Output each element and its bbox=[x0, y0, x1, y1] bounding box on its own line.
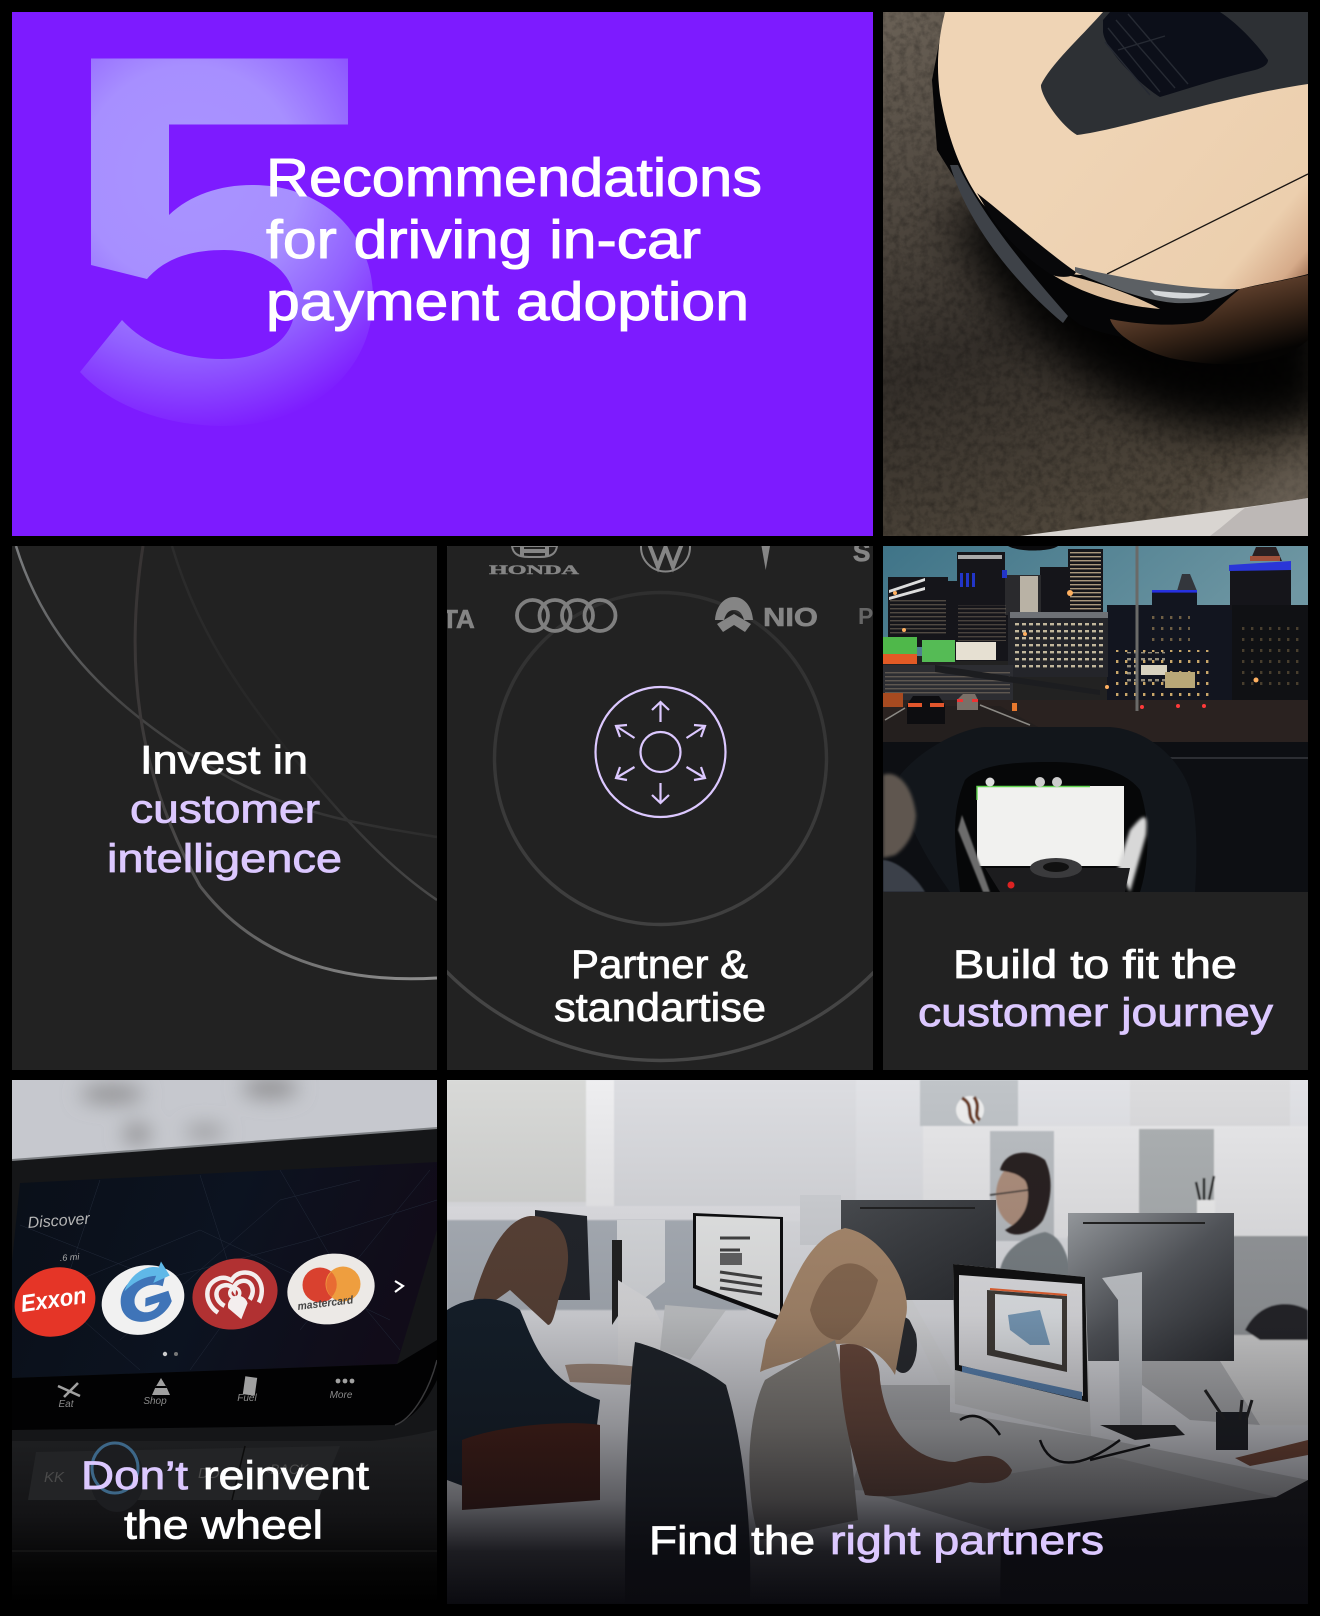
app icon: Mastercard bbox=[281, 1246, 381, 1332]
menu bar bbox=[12, 1340, 437, 1430]
heading: customer journey bbox=[918, 991, 1273, 1035]
vent bbox=[1103, 12, 1268, 97]
title text: Recommendations bbox=[266, 148, 762, 208]
woman in dark jacket bbox=[447, 1216, 640, 1510]
overpass and road bbox=[883, 665, 1013, 703]
heading bbox=[107, 738, 342, 881]
infotainment screen bbox=[0, 1162, 437, 1378]
panel: find the right partners bbox=[447, 1080, 1308, 1604]
app icon: G logo bbox=[93, 1255, 193, 1345]
car shadow on ground bbox=[950, 200, 1320, 431]
heading: Build to fit the bbox=[953, 943, 1237, 987]
panel: car photo bbox=[883, 12, 1308, 536]
heading: standartise bbox=[554, 986, 766, 1030]
title text bbox=[266, 148, 762, 332]
car body bbox=[938, 12, 1308, 290]
heading: reinvent bbox=[203, 1454, 369, 1498]
icon: arrows radiating from a circle bbox=[596, 687, 726, 817]
infotainment screen: .6 mi bbox=[59, 1252, 81, 1263]
dash buttons and knob: DD bbox=[198, 1465, 220, 1482]
dash buttons and knob bbox=[12, 1430, 437, 1604]
title text: for driving in-car bbox=[266, 210, 701, 270]
heading: intelligence bbox=[107, 837, 342, 881]
app icon: iHeartRadio bbox=[185, 1250, 285, 1338]
panel: don't reinvent the wheel bbox=[12, 1080, 437, 1558]
panel: partner and standardise bbox=[442, 537, 873, 1070]
heading bbox=[81, 1454, 369, 1548]
automaker logos: HONDA bbox=[489, 562, 580, 577]
heading: the wheel bbox=[124, 1504, 323, 1548]
panel: title bbox=[12, 12, 873, 536]
heading: Invest in bbox=[140, 738, 308, 782]
dash buttons and knob: KK bbox=[44, 1469, 65, 1486]
heading: Partner & bbox=[571, 943, 748, 987]
panel: invest in customer intelligence bbox=[12, 546, 437, 1070]
console below display bbox=[985, 868, 1130, 892]
jacket on chair bbox=[625, 1342, 750, 1604]
heading: customer bbox=[130, 788, 320, 832]
menu bar: Eat bbox=[58, 1399, 75, 1410]
automaker logos bbox=[442, 522, 873, 634]
car dashboard bbox=[883, 742, 1308, 892]
lower lip bbox=[1012, 240, 1160, 309]
app icon: Exxon: Exxon bbox=[19, 1282, 88, 1318]
heading bbox=[918, 943, 1273, 1035]
big numeral 5 bbox=[80, 58, 373, 426]
desk and accessories bbox=[850, 1385, 1308, 1604]
menu bar: Fuel bbox=[237, 1393, 258, 1404]
hood seam bbox=[1107, 174, 1308, 274]
heading: right partners bbox=[830, 1519, 1104, 1563]
iMac bbox=[953, 1264, 1091, 1436]
automaker logos: P bbox=[858, 603, 873, 629]
automaker logos: NIO bbox=[763, 602, 818, 632]
heading: Don’t bbox=[81, 1454, 188, 1498]
pavement edge bbox=[1020, 498, 1308, 536]
woman at iMac bbox=[749, 1228, 1012, 1540]
blurred windshield background bbox=[12, 1078, 437, 1165]
heading: Find the bbox=[649, 1519, 815, 1563]
cars and lights bbox=[907, 696, 945, 724]
headlight bbox=[1075, 267, 1237, 303]
infotainment screen: Discover bbox=[27, 1211, 91, 1232]
driver hand bbox=[883, 774, 916, 858]
dash buttons and knob: <BACK bbox=[262, 1461, 309, 1477]
in-car display bbox=[977, 786, 1124, 866]
panel: build to fit the customer journey bbox=[883, 546, 1308, 1070]
heading bbox=[649, 1519, 1104, 1563]
office background bbox=[447, 1080, 1308, 1425]
title text: payment adoption bbox=[266, 272, 749, 332]
bottom dark gradient overlay bbox=[447, 1080, 1308, 1604]
car body shadow band bbox=[932, 12, 1308, 344]
night city photo bbox=[883, 546, 1308, 892]
automaker logos: TA bbox=[442, 604, 475, 634]
hood scoop bbox=[1041, 12, 1308, 135]
automaker logos: S bbox=[853, 537, 870, 567]
monitors bbox=[535, 1195, 1260, 1440]
skyline lights bbox=[889, 552, 1300, 700]
heading bbox=[554, 943, 766, 1030]
menu bar: Shop bbox=[143, 1396, 167, 1407]
display frame bbox=[12, 1128, 437, 1480]
lower brown fascia bbox=[1110, 275, 1308, 364]
black air intake bbox=[977, 193, 1076, 277]
app icon: Exxon bbox=[6, 1257, 104, 1347]
app icon: Mastercard: mastercard bbox=[297, 1294, 354, 1313]
menu bar: More bbox=[330, 1390, 353, 1401]
front splitter bbox=[950, 165, 1068, 323]
street signs bbox=[883, 637, 1195, 688]
man at desk bbox=[990, 1153, 1075, 1300]
